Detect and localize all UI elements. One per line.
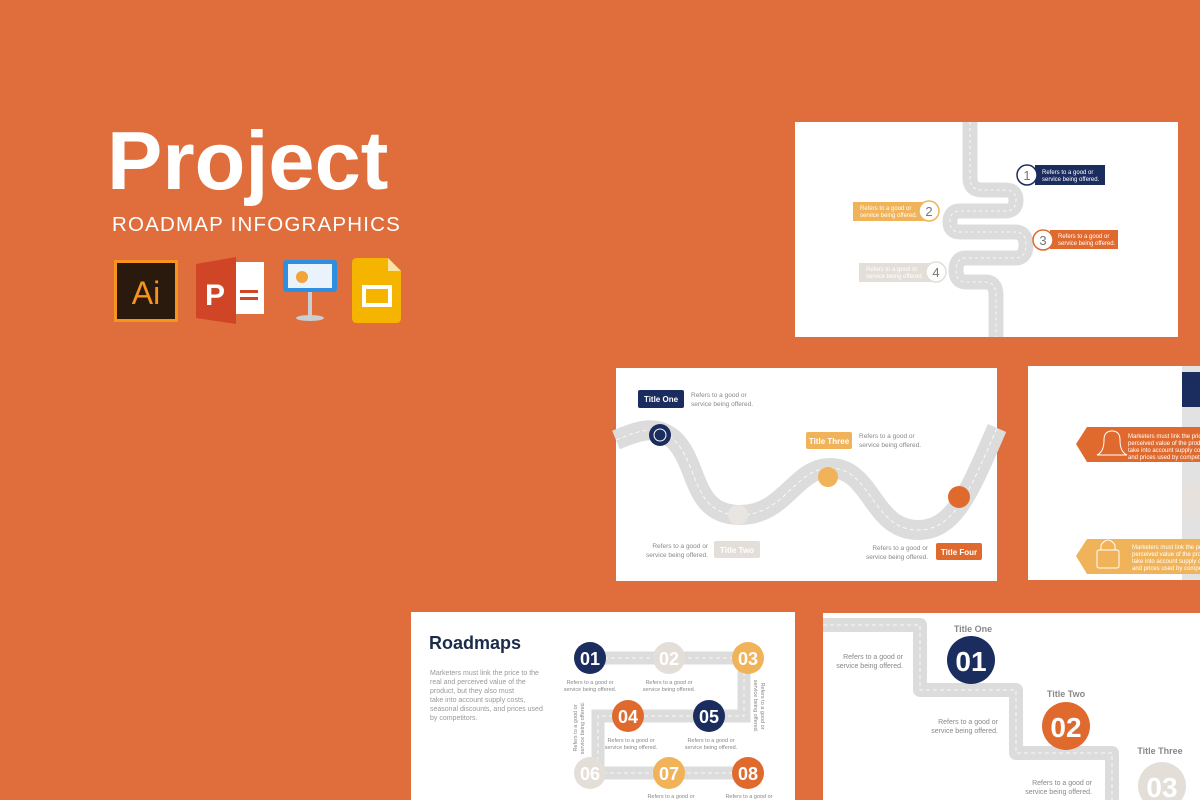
step 2 <box>853 201 939 221</box>
step 3 <box>1033 230 1118 250</box>
paragraph: take into account supply costs, <box>430 697 525 704</box>
step 01 <box>836 624 995 684</box>
captions: service being offered. <box>685 745 738 751</box>
heading: Roadmaps <box>429 633 521 653</box>
milestone 2: Refers to a good or <box>652 543 709 550</box>
step 01: 01 <box>955 646 987 677</box>
numbered circles: 03 <box>738 649 758 669</box>
milestone 4 <box>866 486 982 561</box>
captions: Refers to a good or <box>607 738 655 744</box>
milestone 4: Title Four <box>941 548 977 557</box>
step 4: 4 <box>932 265 940 280</box>
banner orange <box>1076 427 1200 462</box>
milestone 3: Refers to a good or <box>859 433 915 440</box>
milestone 1 <box>638 390 753 446</box>
step 01: service being offered. <box>836 663 903 670</box>
milestone 4: Refers to a good or <box>872 545 929 552</box>
captions: Refers to a good or <box>566 680 614 686</box>
milestone 1: Refers to a good or <box>691 392 747 399</box>
milestone 4: service being offered. <box>866 554 928 561</box>
step 2: Refers to a good or <box>860 206 911 212</box>
step 2: 2 <box>925 204 933 219</box>
milestone 3: Title Three <box>809 437 850 446</box>
captions: service being offered. <box>752 680 758 733</box>
title: Project <box>107 114 388 207</box>
step 02: 02 <box>1050 712 1082 743</box>
milestone 2 <box>646 505 760 559</box>
milestone 1: service being offered. <box>691 401 753 408</box>
milestone 3: service being offered. <box>859 442 921 449</box>
captions: Refers to a good or <box>647 794 695 800</box>
captions: Refers to a good or <box>645 680 693 686</box>
step 02: Refers to a good or <box>938 719 999 726</box>
step 02 <box>931 689 1090 750</box>
road <box>590 658 750 773</box>
step 03: service being offered. <box>1025 789 1092 796</box>
paragraph: by competitors. <box>430 715 478 722</box>
paragraph: seasonal discounts, and prices used <box>430 706 543 713</box>
numbered circles: 06 <box>580 764 600 784</box>
icon: keynote <box>283 260 337 321</box>
step 4 <box>859 262 946 282</box>
milestone 2: service being offered. <box>646 552 708 559</box>
captions: service being offered. <box>564 687 617 693</box>
step 01: Refers to a good or <box>843 654 904 661</box>
captions: Refers to a good or <box>687 738 735 744</box>
numbered circles: 04 <box>618 707 638 727</box>
step 1: service being offered. <box>1042 177 1100 183</box>
captions: Refers to a good or <box>573 704 579 752</box>
slide: staircase road <box>823 613 1200 800</box>
paragraph: product, but they also must <box>430 688 514 695</box>
captions: service being offered. <box>605 745 658 751</box>
icon: illustrator <box>114 260 178 322</box>
slide: wavy road <box>616 368 997 581</box>
step 01: Title One <box>954 624 992 634</box>
step 4: Refers to a good or <box>866 267 917 273</box>
milestone 1: Title One <box>644 395 679 404</box>
step 02: Title Two <box>1047 689 1086 699</box>
captions <box>564 680 773 800</box>
step 03: Refers to a good or <box>1032 780 1093 787</box>
step 03 <box>1025 746 1186 800</box>
captions: service being offered. <box>643 687 696 693</box>
paragraph: Marketers must link the price to the <box>430 670 539 677</box>
milestone 2: Title Two <box>720 546 754 555</box>
numbered circles: 07 <box>659 764 679 784</box>
slide: banners (cropped) <box>1028 366 1200 580</box>
captions: Refers to a good or <box>725 794 773 800</box>
icon: powerpoint: P <box>205 279 225 312</box>
icon: powerpoint <box>196 257 264 324</box>
step 3: Refers to a good or <box>1058 234 1109 240</box>
captions: service being offered. <box>580 701 586 754</box>
step 3: service being offered. <box>1058 241 1116 247</box>
slide: winding road vertical <box>795 122 1178 337</box>
captions: Refers to a good or <box>759 682 765 730</box>
step 1 <box>1017 165 1105 185</box>
road <box>950 122 1026 337</box>
slide: roadmaps 8 steps <box>411 612 795 800</box>
paragraph: real and perceived value of the <box>430 679 526 686</box>
step 3: 3 <box>1039 233 1047 248</box>
step 03: Title Three <box>1137 746 1183 756</box>
paragraph <box>430 670 543 722</box>
icon: google slides <box>352 258 401 323</box>
step 1: Refers to a good or <box>1042 170 1093 176</box>
step 4: service being offered. <box>866 274 924 280</box>
numbered circles: 08 <box>738 764 758 784</box>
numbered circles <box>574 642 764 789</box>
numbered circles: 01 <box>580 649 600 669</box>
step 02: service being offered. <box>931 728 998 735</box>
numbered circles: 02 <box>659 649 679 669</box>
step 2: service being offered. <box>860 213 918 219</box>
subtitle: ROADMAP INFOGRAPHICS <box>112 213 401 236</box>
icon: illustrator: Ai <box>132 275 160 311</box>
banner yellow <box>1076 539 1200 574</box>
milestone 3 <box>806 432 921 487</box>
numbered circles: 05 <box>699 707 719 727</box>
step 1: 1 <box>1023 168 1031 183</box>
